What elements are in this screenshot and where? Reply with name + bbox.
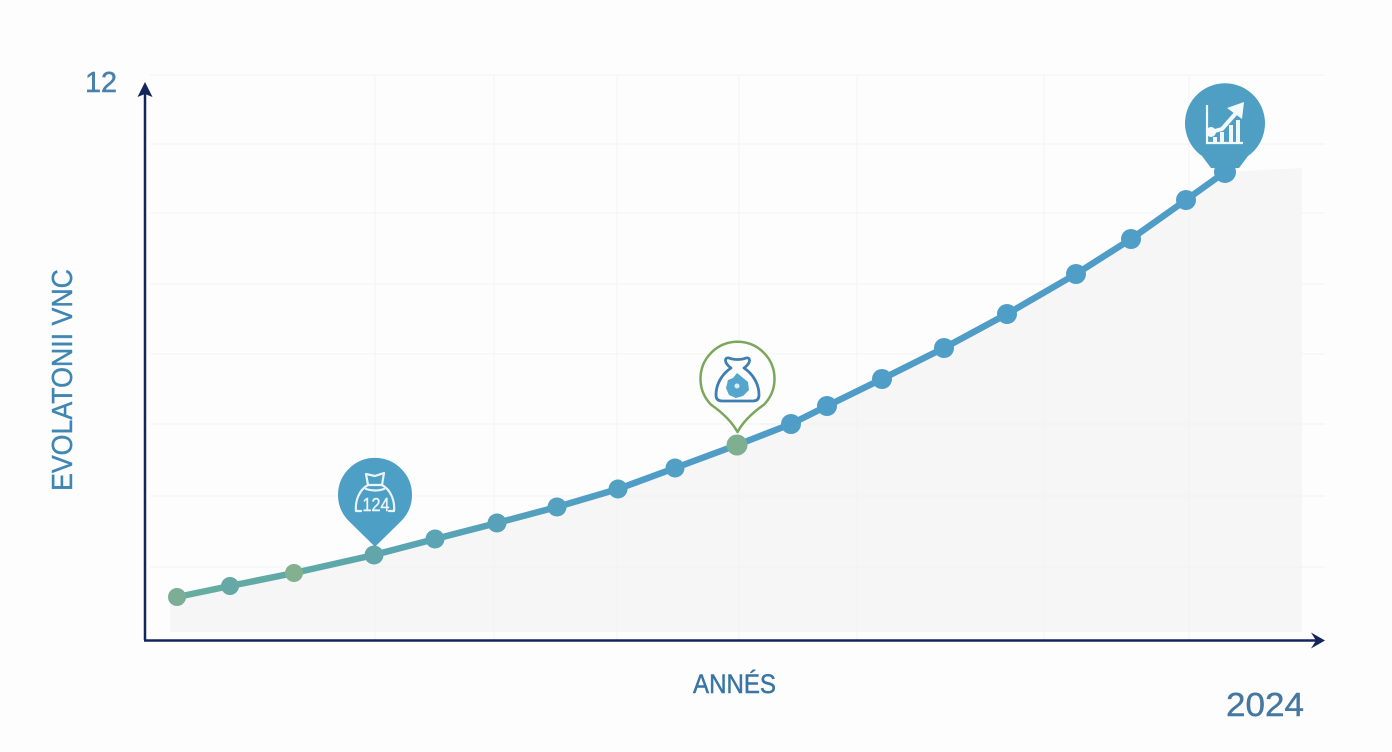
growth curve xyxy=(177,172,1225,597)
y axis top value: 12 xyxy=(85,67,117,99)
x axis title: ANNÉS xyxy=(693,669,776,699)
y axis with arrow xyxy=(138,82,152,640)
marker: money bag 124 xyxy=(338,458,412,546)
x axis end year: 2024 xyxy=(1226,686,1304,723)
y axis title: EVOLATONII VNC xyxy=(47,269,79,491)
marker: growth chart xyxy=(1185,83,1265,168)
marker: green outlined money bag xyxy=(701,342,775,432)
data points xyxy=(168,161,1236,606)
x axis with arrow xyxy=(144,632,1325,648)
shaded area under curve xyxy=(170,168,1302,632)
marker: money bag 124: 124 xyxy=(362,495,390,515)
